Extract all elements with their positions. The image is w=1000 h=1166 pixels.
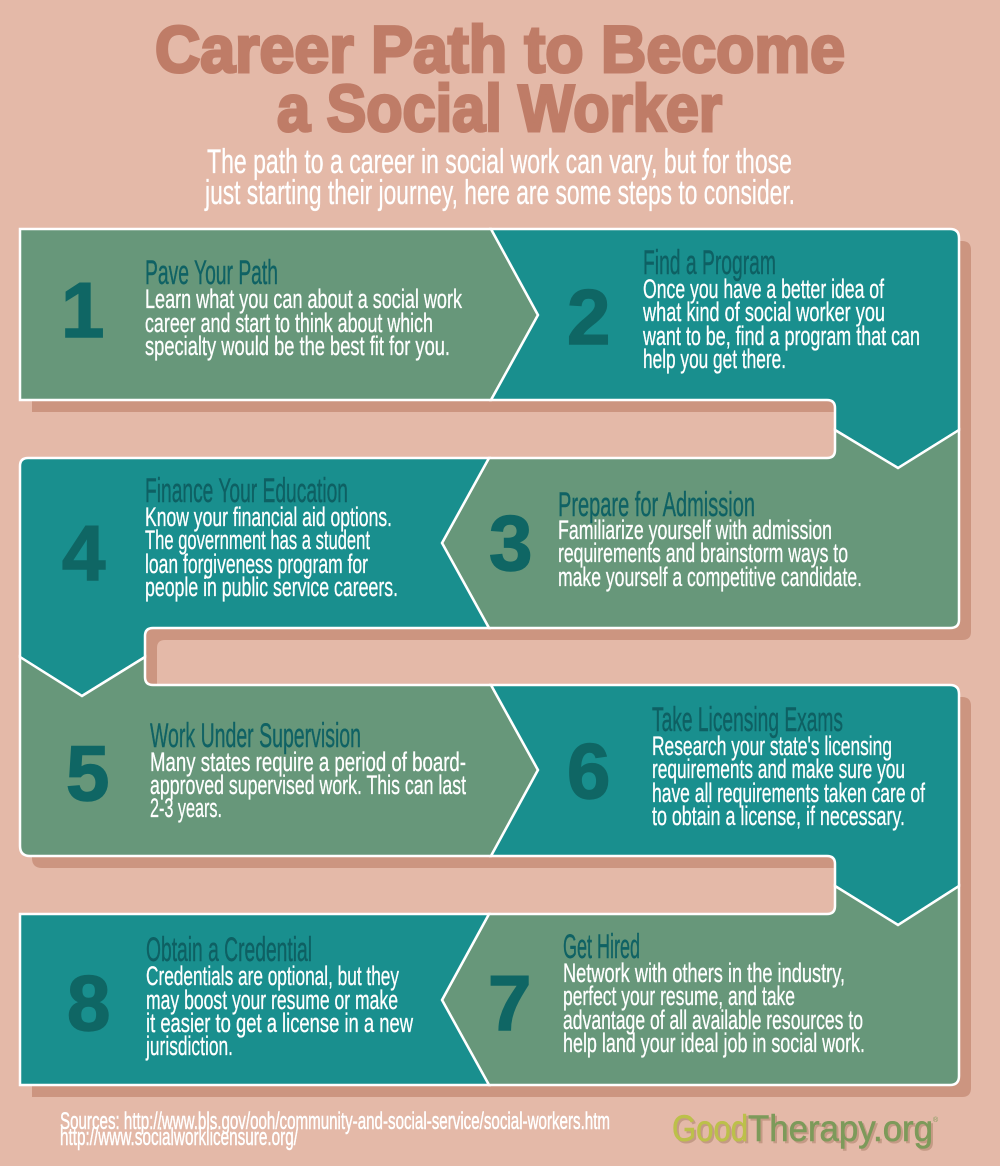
number 4: 4	[62, 509, 105, 597]
step 5 text: Work Under Supervision	[150, 717, 361, 755]
step 1 text: Pave Your Path	[145, 254, 278, 292]
title: a Social Worker	[277, 71, 722, 145]
step 3 text: Prepare for Admission	[558, 486, 755, 524]
step 3 text: requirements and brainstorm ways to	[558, 538, 848, 568]
step 8 text: Obtain a Credential	[146, 931, 312, 969]
step 2 text	[642, 244, 920, 374]
sources: Sources: http://www.bls.gov/ooh/community-and-social-service/social-workers.htm	[60, 1108, 610, 1135]
step 5 text: Many states require a period of board-	[150, 747, 466, 777]
step 4 text: loan forgiveness program for	[145, 549, 368, 579]
path drop shadow	[32, 241, 971, 1097]
sources	[60, 1108, 610, 1151]
panel: step 6	[491, 685, 959, 925]
step 6 text: Take Licensing Exams	[652, 701, 843, 739]
panel: step 8	[20, 914, 489, 1085]
step 2 text: what kind of social worker you	[642, 297, 885, 327]
step 1 text: Learn what you can about a social work	[145, 284, 462, 314]
subtitle	[204, 143, 795, 212]
step 4 text	[145, 472, 398, 602]
logo: GoodTherapy.org: Good	[674, 1110, 750, 1151]
number 2: 2	[567, 273, 610, 361]
step 8 text: jurisdiction.	[145, 1031, 233, 1061]
logo: GoodTherapy.org	[672, 1108, 939, 1151]
step 1 text: career and start to think about which	[145, 308, 433, 338]
step 2 text: Find a Program	[643, 244, 776, 282]
step 4 text: Finance Your Education	[145, 472, 348, 510]
step 8 text: may boost your resume or make	[146, 985, 398, 1015]
logo: GoodTherapy.org: ®	[933, 1116, 939, 1124]
step 5 text: approved supervised work. This can last	[150, 770, 466, 800]
number 8: 8	[67, 959, 110, 1047]
panel: step 3	[442, 430, 959, 628]
step 8 text	[145, 931, 413, 1061]
step 7 text: perfect your resume, and take	[563, 981, 795, 1011]
title: Career Path to Become	[155, 12, 845, 86]
step 4 text: people in public service careers.	[145, 572, 398, 602]
number 3: 3	[489, 499, 532, 587]
number 6: 6	[567, 727, 610, 815]
step 3 text	[558, 486, 862, 592]
step 8 text: Credentials are optional, but they	[146, 961, 399, 991]
logo: GoodTherapy.org: Therapy.org	[750, 1110, 935, 1151]
panel: step 4	[20, 458, 489, 696]
logo: GoodTherapy.org: Therapy.org	[748, 1108, 933, 1149]
step 6 text	[652, 701, 925, 831]
logo: GoodTherapy.org: Good	[672, 1108, 748, 1149]
number 7: 7	[488, 959, 531, 1047]
step 8 text: it easier to get a license in a new	[146, 1008, 413, 1038]
panel: step 7	[442, 886, 959, 1085]
title	[155, 12, 845, 145]
sources: http://www.socialworklicensure.org/	[60, 1124, 298, 1151]
number 1: 1	[61, 266, 104, 354]
panel: step 2	[491, 229, 959, 468]
step 4 text: The government has a student	[145, 525, 370, 555]
step 2 text: help you get there.	[643, 344, 786, 374]
step 3 text: Familiarize yourself with admission	[558, 515, 832, 545]
step 1 text	[145, 254, 462, 361]
number 5: 5	[66, 729, 109, 817]
panel: step 5	[20, 657, 538, 856]
step 7 text	[563, 928, 865, 1058]
step 5 text	[150, 717, 466, 823]
panel: step 1	[20, 229, 538, 400]
step 5 text: 2-3 years.	[150, 793, 222, 823]
step 7 text: Get Hired	[563, 928, 640, 966]
step 4 text: Know your financial aid options.	[145, 502, 392, 532]
step 7 text: Network with others in the industry,	[563, 958, 845, 988]
step 1 text: specialty would be the best fit for you.	[145, 331, 450, 361]
